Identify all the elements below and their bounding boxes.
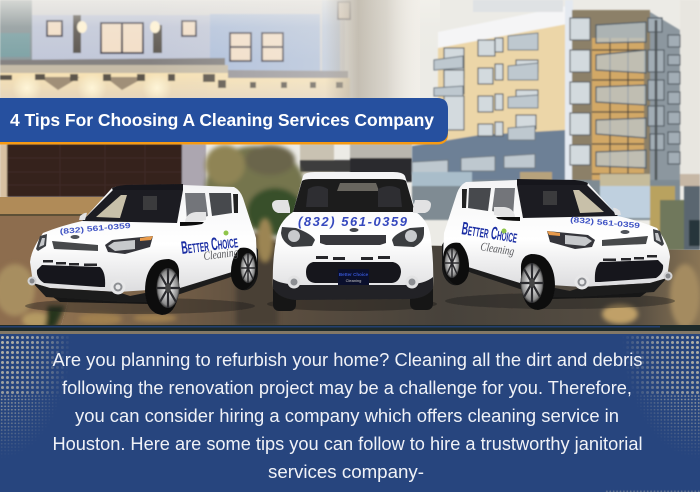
- glass tower frames: [592, 38, 644, 180]
- licence plate: [338, 269, 369, 285]
- logo: Better Choice: [180, 231, 239, 258]
- title: 4 Tips For Choosing A Cleaning Services Company: [10, 110, 434, 130]
- background photo: house and apartment building: [0, 0, 700, 334]
- intro text: following the renovation project may be a challenge for you. Therefore,: [62, 378, 632, 398]
- van: left: [25, 184, 258, 315]
- house facade: [0, 0, 412, 200]
- halftone: right: [626, 336, 700, 454]
- garden plants: [205, 145, 305, 236]
- apartment building: [412, 0, 700, 250]
- halftone: left: [0, 336, 69, 454]
- driveway: [0, 197, 700, 334]
- logo: [180, 230, 239, 263]
- intro text: you can consider hiring a company which offers cleaning service in: [75, 406, 619, 426]
- title banner: [0, 98, 448, 144]
- phone number on hood: (832) 561-0359: [298, 214, 408, 229]
- house haze: [0, 0, 440, 60]
- logo: [460, 218, 519, 258]
- intro text: Are you planning to refurbish your home? Cleaning all the dirt and debris: [52, 350, 642, 370]
- van: centre: [267, 172, 437, 311]
- logo: Better Choice: [460, 218, 519, 247]
- lower building behind cars: [412, 180, 680, 220]
- panel background: [0, 334, 700, 492]
- phone number on hood: (832) 561-0359: [570, 215, 640, 230]
- banner blue bar: [0, 98, 448, 142]
- van: right: [442, 179, 675, 310]
- intro panel: [0, 334, 700, 492]
- logo: Cleaning: [203, 245, 239, 263]
- licence plate: Better Choice: [339, 272, 369, 277]
- licence plate: Cleaning: [346, 278, 361, 283]
- intro text: services company-: [268, 462, 424, 482]
- banner orange underline: [0, 100, 448, 144]
- phone number on hood: (832) 561-0359: [59, 221, 131, 236]
- intro text: Houston. Here are some tips you can follow to hire a trustworthy janitorial: [52, 434, 642, 454]
- halftone: bottom right: [605, 489, 700, 492]
- garage door: [0, 144, 7, 198]
- intro text: [52, 350, 642, 482]
- logo: Cleaning: [480, 239, 515, 258]
